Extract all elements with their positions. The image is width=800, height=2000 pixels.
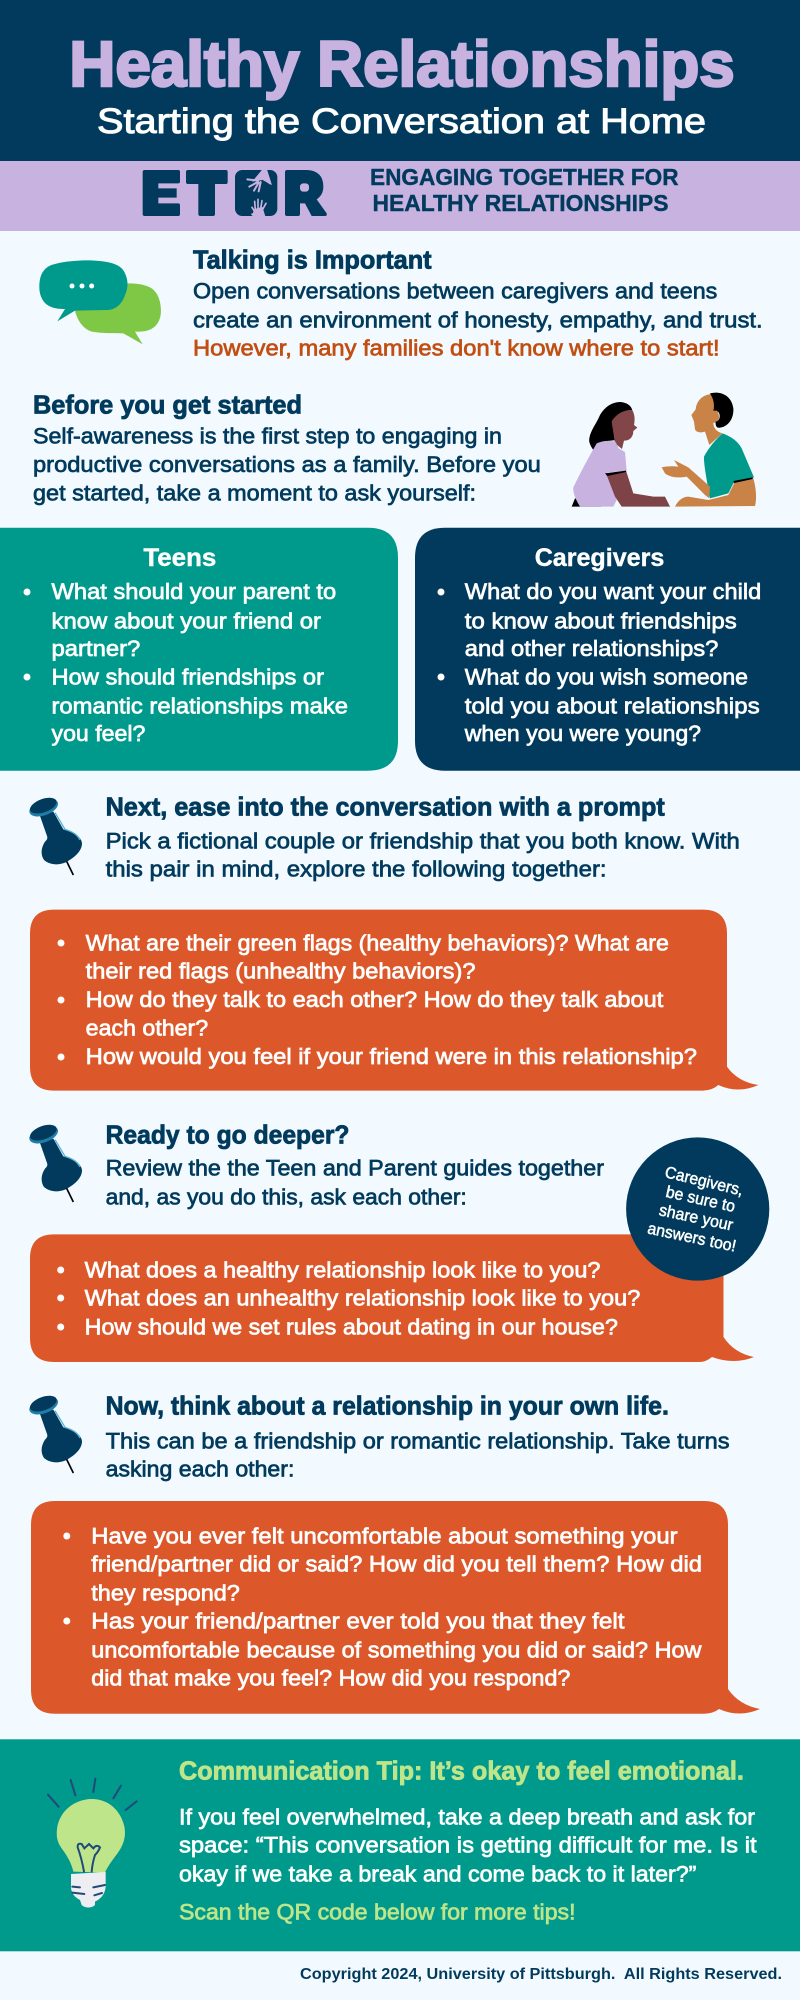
body text: Self-awareness is the first step to engaging in <box>33 423 502 448</box>
body text: However, many families don't know where to start! <box>193 335 720 360</box>
section: your own life <box>106 1391 730 1481</box>
list: caregiver questions: and other relationships? <box>465 636 718 661</box>
subtitle: Starting the Conversation at Home <box>97 101 706 141</box>
list <box>63 1523 702 1691</box>
list: teen questions: you feel? <box>52 721 145 746</box>
list <box>57 1258 640 1340</box>
section: talking is important <box>193 245 763 360</box>
body text: and, as you do this, ask each other: <box>106 1184 467 1209</box>
call to action: Scan the QR code below for more tips! <box>179 1900 576 1925</box>
body text <box>106 1428 730 1481</box>
body text: Open conversations between caregivers and teens <box>193 279 717 304</box>
list: What does a healthy relationship look like to you? <box>85 1258 600 1282</box>
callout: caregivers circle: be sure to <box>664 1183 737 1216</box>
heading: Next, ease into the conversation with a prompt <box>106 791 665 821</box>
speech bubble: own life questions <box>31 1501 760 1714</box>
list: teen questions: romantic relationships make <box>52 693 348 718</box>
list: What does an unhealthy relationship look like to you? <box>85 1286 640 1311</box>
speech bubble: deeper questions <box>30 1234 754 1362</box>
list: How do they talk to each other? How do they talk about <box>86 987 663 1012</box>
logo band <box>0 161 800 231</box>
panel: teens <box>0 528 398 771</box>
callout: caregivers circle: answers too! <box>646 1220 738 1256</box>
heading: Communication Tip: It’s okay to feel emotional. <box>179 1755 744 1785</box>
list: Have you ever felt uncomfortable about something your <box>91 1523 678 1548</box>
illustration: teen and caregiver talking <box>572 393 756 507</box>
body text: If you feel overwhelmed, take a deep breath and ask for <box>179 1805 755 1830</box>
list: How should we set rules about dating in our house? <box>85 1314 618 1340</box>
body text <box>193 279 763 360</box>
icon: push pin 3 <box>27 1393 82 1473</box>
body text: Review the the Teen and Parent guides together <box>106 1156 604 1180</box>
section: before you get started <box>33 389 541 506</box>
list: How would you feel if your friend were in this relationship? <box>86 1044 697 1069</box>
list: caregiver questions <box>438 579 761 746</box>
icon: push pin 1 <box>27 795 82 875</box>
icon: push pin 2 <box>27 1122 82 1202</box>
list: teen questions: partner? <box>52 636 140 661</box>
heading: Talking is Important <box>193 245 432 275</box>
tagline: HEALTHY RELATIONSHIPS <box>372 190 668 216</box>
list: their red flags (unhealthy behaviors)? <box>86 958 475 984</box>
list: caregiver questions: to know about friendships <box>465 608 737 633</box>
body text: create an environment of honesty, empathy, and trust. <box>193 307 763 332</box>
list: uncomfortable because of something you did or said? How <box>91 1638 702 1662</box>
section: ready to go deeper <box>106 1120 604 1209</box>
list: did that make you feel? How did you respond? <box>91 1666 570 1691</box>
list: friend/partner did or said? How did you tell them? How did <box>91 1551 702 1576</box>
heading: Now, think about a relationship in your own life. <box>106 1391 669 1421</box>
body text <box>33 423 541 506</box>
icon: light bulb <box>48 1779 137 1907</box>
body text: productive conversations as a family. Before you <box>33 452 541 477</box>
callout: caregivers circle: share your <box>657 1201 735 1235</box>
callout: caregivers circle <box>626 1137 769 1281</box>
list: teen questions <box>24 579 348 746</box>
list: teen questions: What should your parent to <box>52 579 336 604</box>
icon: chat bubbles <box>39 260 161 344</box>
list: each other? <box>86 1016 208 1040</box>
heading: Ready to go deeper? <box>106 1120 349 1150</box>
list: they respond? <box>91 1581 240 1606</box>
list: caregiver questions: What do you wish someone <box>465 665 748 690</box>
body text: Pick a fictional couple or friendship that you both know. With <box>106 828 740 853</box>
list: caregiver questions: told you about relationships <box>465 693 760 718</box>
body text: okay if we take a break and come back to it later?” <box>179 1862 696 1887</box>
panel: caregivers <box>415 528 800 771</box>
callout: caregivers circle: Caregivers, <box>663 1163 745 1200</box>
body text <box>106 828 740 882</box>
body text: space: “This conversation is getting difficult for me. Is it <box>179 1833 757 1858</box>
list: Has your friend/partner ever told you that they felt <box>91 1609 625 1634</box>
section: prompt <box>106 791 740 882</box>
body text: asking each other: <box>106 1456 294 1481</box>
body text: this pair in mind, explore the following together: <box>106 857 607 882</box>
title: Healthy Relationships <box>69 28 735 100</box>
tagline: ENGAGING TOGETHER FOR <box>370 164 679 190</box>
list: caregiver questions: when you were young? <box>464 721 701 746</box>
body text <box>179 1805 757 1887</box>
list: teen questions: How should friendships or <box>52 665 324 690</box>
copyright: Copyright 2024, University of Pittsburgh. All Rights Reserved. <box>300 1966 782 1983</box>
heading: caregivers: Caregivers <box>535 544 664 572</box>
header banner <box>0 0 800 161</box>
heading: Before you get started <box>33 389 302 419</box>
list: What are their green flags (healthy behaviors)? What are <box>86 930 669 956</box>
speech bubble: prompt questions <box>30 910 758 1091</box>
heading: teens: Teens <box>143 544 216 572</box>
panel: communication tip <box>0 1739 800 1951</box>
list: caregiver questions: What do you want your child <box>465 579 761 604</box>
tagline <box>370 164 679 216</box>
list: teen questions: know about your friend or <box>52 608 321 633</box>
list <box>58 930 697 1069</box>
body text <box>106 1156 604 1209</box>
logo: ETOR with hands <box>143 170 327 216</box>
body text: This can be a friendship or romantic relationship. Take turns <box>106 1428 730 1453</box>
body text: get started, take a moment to ask yourself: <box>33 481 476 506</box>
